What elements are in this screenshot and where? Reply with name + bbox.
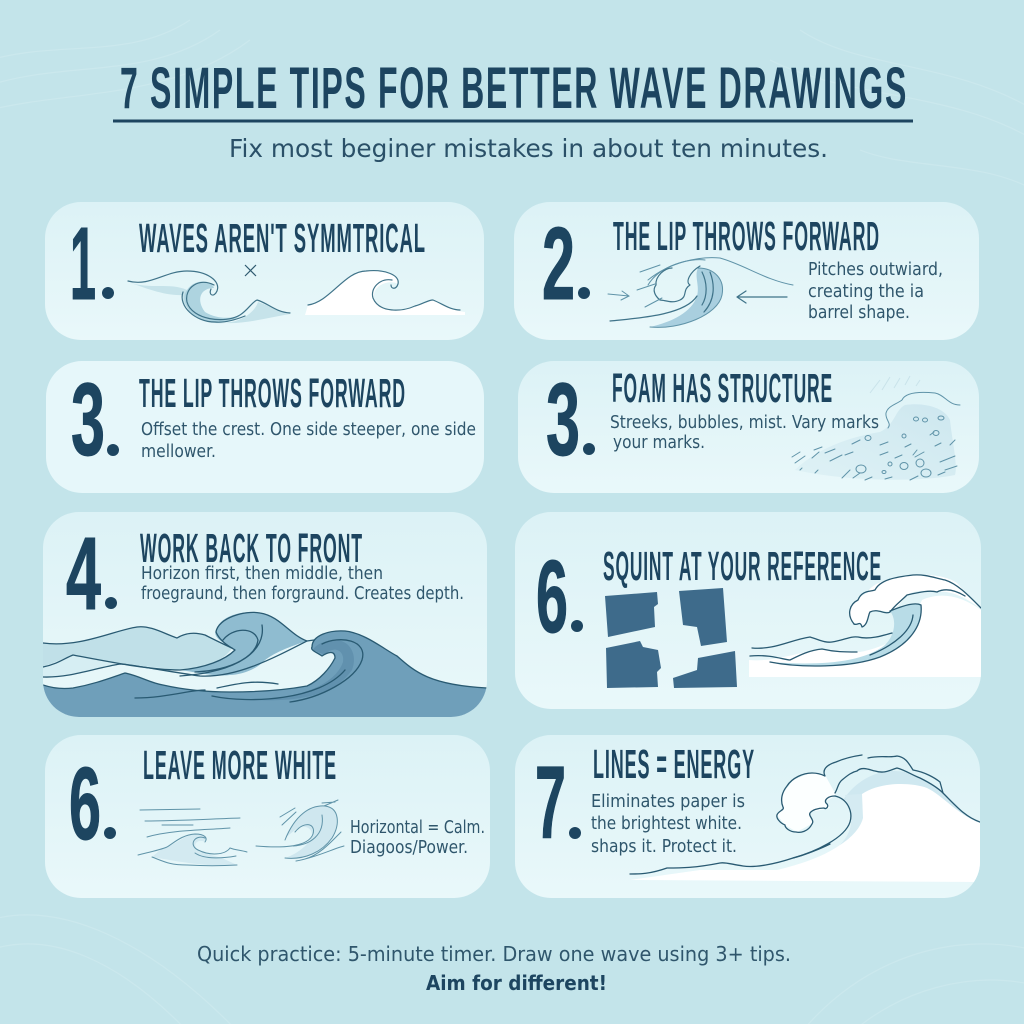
number 6: 6 xyxy=(536,539,568,654)
number 3: 3 xyxy=(546,362,580,477)
number 1: 1 xyxy=(70,206,96,321)
panel: tip 1 waves aren't symmetrical xyxy=(45,202,484,340)
panel: tip 3 foam has structure xyxy=(518,361,979,493)
number 7: 7 xyxy=(535,745,566,860)
icon: value blocks xyxy=(605,588,737,688)
panel: tip 4 work back to front xyxy=(43,512,487,717)
title underline xyxy=(113,120,913,122)
panel: tip 6 leave more white xyxy=(45,735,490,898)
illustration: white wave xyxy=(630,755,980,882)
text block: your marks. xyxy=(613,432,705,453)
icon: calm wave xyxy=(138,809,247,866)
panel: tip 7 lines = energy xyxy=(515,735,980,898)
arrow: left xyxy=(608,291,629,300)
number 2: 2 xyxy=(542,206,575,321)
arrow: right xyxy=(737,291,787,303)
text block xyxy=(591,791,745,857)
icon: wrong wave xyxy=(128,271,290,323)
text block: Diagoos/Power. xyxy=(350,837,468,858)
icon: cross mark xyxy=(245,265,256,276)
text block xyxy=(808,259,943,323)
panel: tip 1 waves aren't symmetrical: WAVES AREN'T SYMMTRICAL xyxy=(139,215,426,261)
icon: better wave xyxy=(305,271,465,315)
text block xyxy=(141,419,476,462)
text block xyxy=(141,563,464,604)
panel: tip 6 leave more white: LEAVE MORE WHITE xyxy=(143,742,337,788)
text block: Streeks, bubbles, mist. Vary marks xyxy=(610,412,879,433)
icon: diagonal wave xyxy=(256,800,344,861)
footer text xyxy=(197,942,791,995)
panel: tip 4 work back to front: WORK BACK TO FRONT xyxy=(140,525,363,571)
text block: Horizontal = Calm. xyxy=(350,817,485,838)
panel: tip 3 the lip throws forward: THE LIP THROWS FORWARD xyxy=(139,370,406,416)
panel: tip 2 the lip throws forward xyxy=(514,202,979,340)
text block: barrel shape. xyxy=(808,302,910,323)
text block: Pitches outwiard, xyxy=(808,259,943,280)
text block: mellower. xyxy=(141,441,216,462)
text block: the brightest white. xyxy=(591,813,742,834)
text block: Horizon first, then middle, then xyxy=(141,563,383,584)
icon: barrel wave xyxy=(610,258,793,327)
panel: tip 6 squint at your reference xyxy=(515,512,981,709)
footer text: Quick practice: 5-minute timer. Draw one wave using 3+ tips. xyxy=(197,942,791,966)
text block: shaps it. Protect it. xyxy=(591,836,737,857)
number 6: 6 xyxy=(69,746,101,861)
text block: creating the ia xyxy=(808,281,924,302)
text block xyxy=(610,412,879,453)
panel: tip 3 the lip throws forward xyxy=(46,361,484,493)
icon: foam illustration xyxy=(792,376,960,480)
subtitle: Fix most beginer mistakes in about ten minutes. xyxy=(229,134,828,163)
text block: froegraund, then forgraund. Creates depth. xyxy=(141,583,464,604)
illustration: layered waves xyxy=(43,612,487,717)
panel: tip 7 lines = energy: LINES = ENERGY xyxy=(593,741,755,787)
text block: Offset the crest. One side steeper, one side xyxy=(141,419,476,440)
number 4: 4 xyxy=(66,516,101,631)
number 3: 3 xyxy=(71,362,105,477)
text block: Eliminates paper is xyxy=(591,791,745,812)
text block xyxy=(350,817,485,858)
illustration: reference wave xyxy=(749,575,981,677)
footer text: Aim for different! xyxy=(426,971,607,995)
